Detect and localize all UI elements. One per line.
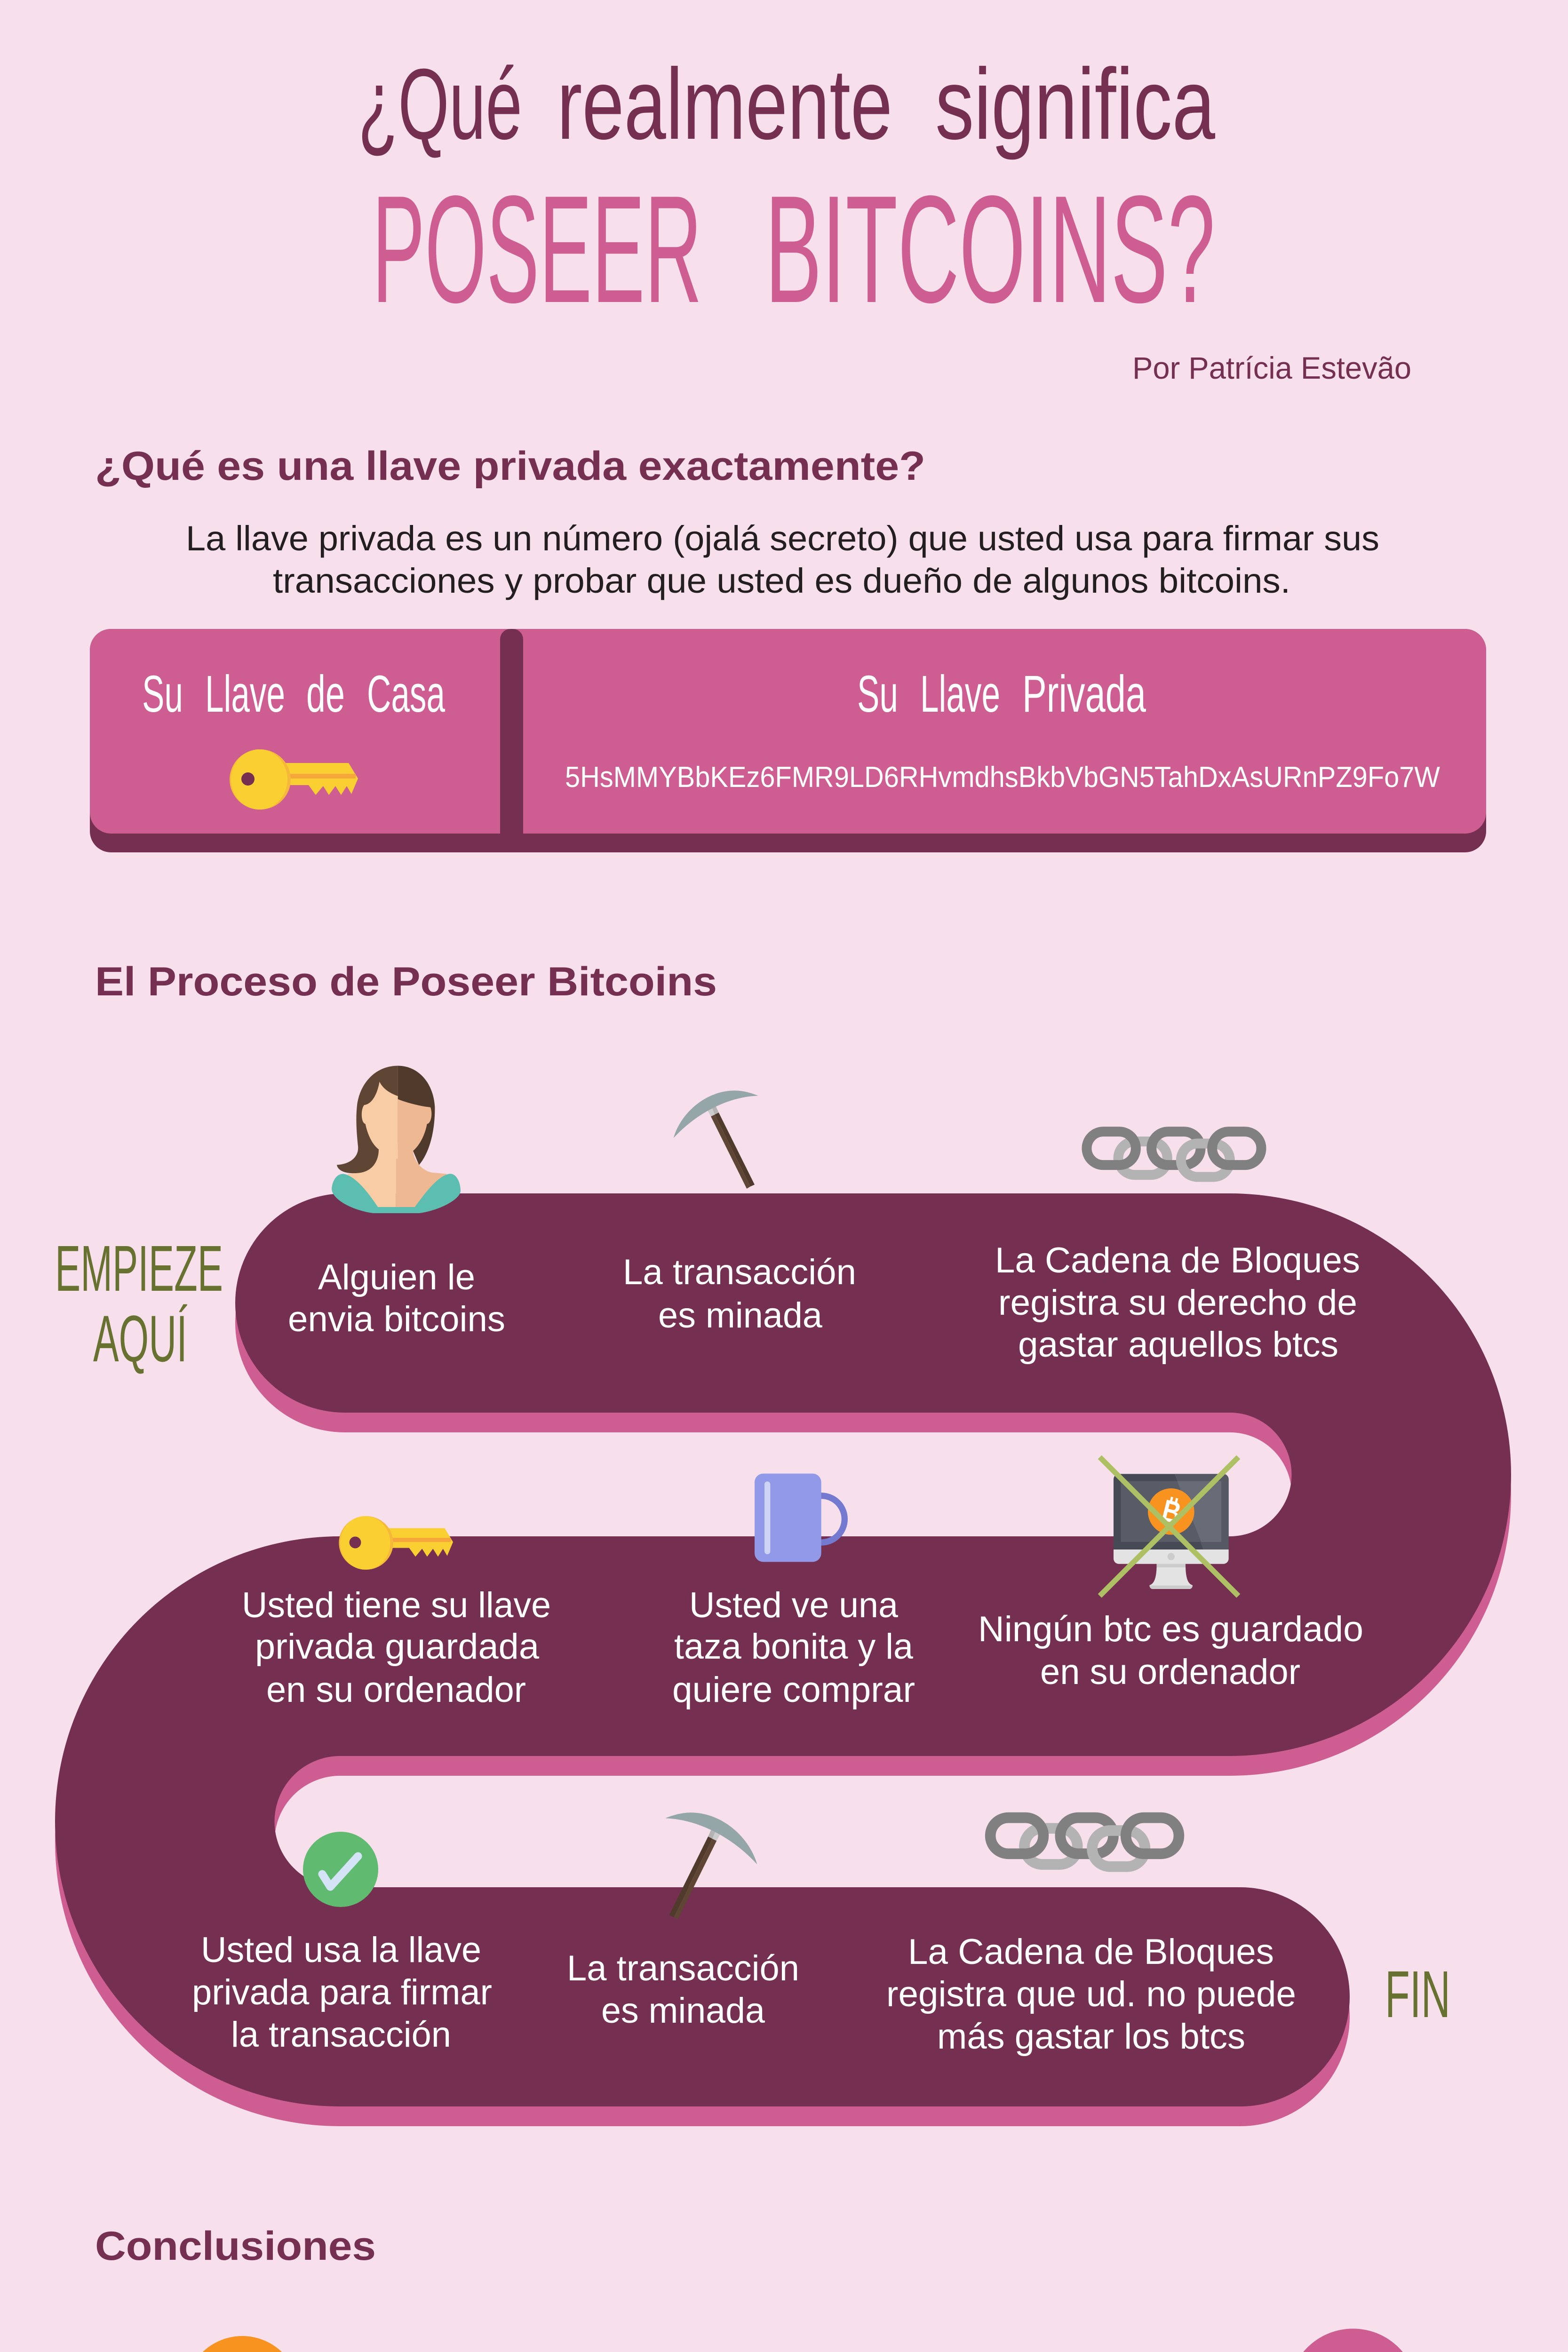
step text: transaction mined: La transacción: [623, 1252, 856, 1292]
step text: blockchain records spent: [886, 1932, 1296, 2057]
panel label: private key: Llave: [920, 665, 1000, 723]
heading: conclusions: Conclusiones: [95, 2224, 376, 2269]
icon: pickaxe mirrored: [665, 1812, 757, 1920]
step text: private key saved: Usted tiene su llave: [242, 1585, 551, 1625]
start label: AQUÍ: [93, 1302, 187, 1375]
panel label: private key: [857, 665, 1146, 723]
icon: house key: [230, 749, 358, 810]
panel label: house key: [142, 665, 446, 723]
panel label: private key: Privada: [1022, 665, 1146, 723]
start label: EMPIEZE: [55, 1232, 223, 1305]
title: [358, 48, 1216, 334]
winding process road: [55, 1193, 1511, 2126]
title line 1: ¿Qué: [358, 48, 522, 160]
title line 1: [358, 48, 1216, 160]
step text: transaction mined again: es minada: [601, 1991, 765, 2031]
heading: process: El Proceso de Poseer Bitcoins: [95, 959, 717, 1004]
step text: signs the transaction: [192, 1930, 492, 2055]
icon: key: [339, 1516, 453, 1570]
step text: wants to buy a mug: Usted ve una: [689, 1585, 899, 1625]
icon: chain: [1087, 1132, 1261, 1177]
panel label: private key: Su: [857, 665, 898, 723]
step text: wants to buy a mug: quiere comprar: [672, 1670, 915, 1710]
step text: no btc stored: [978, 1609, 1363, 1692]
step text: blockchain records spent: más gastar los btcs: [937, 2017, 1245, 2057]
bitcoin coin: [1148, 1488, 1194, 1535]
icon: pickaxe: [674, 1090, 758, 1189]
heading: private key: ¿Qué es una llave privada exactamente?: [95, 444, 925, 489]
icon: bitcoin coin: [185, 2336, 299, 2352]
step text: transaction mined: [623, 1252, 856, 1335]
end label: FIN: [1385, 1957, 1450, 2031]
panel label: house key: Su: [142, 665, 183, 723]
title line 1: significa: [935, 48, 1216, 160]
icon: mug: [755, 1474, 844, 1562]
icon: chain lower: [990, 1818, 1179, 1867]
step text: no btc stored: Ningún btc es guardado: [978, 1609, 1363, 1649]
step text: blockchain records right: [995, 1240, 1360, 1365]
step text: private key saved: privada guardada: [255, 1627, 540, 1667]
step text: blockchain records right: gastar aquellos btcs: [1018, 1325, 1338, 1365]
text block: private key definition: La llave privada es un número (ojalá secreto) que usted usa para firmar sus: [186, 519, 1379, 558]
icon: woman: [332, 1066, 461, 1213]
panel label: house key: Casa: [367, 665, 446, 723]
step text: transaction mined again: La transacción: [567, 1948, 799, 1988]
step text: private key saved: en su ordenador: [266, 1670, 526, 1710]
step text: someone sends bitcoins: Alguien le: [318, 1257, 475, 1297]
step text: signs the transaction: la transacción: [231, 2015, 451, 2055]
step text: someone sends bitcoins: [288, 1257, 505, 1339]
step text: wants to buy a mug: taza bonita y la: [674, 1627, 914, 1667]
private key string: 5HsMMYBbKEz6FMR9LD6RHvmdhsBkbVbGN5TahDxAsURnPZ9Fo7W: [565, 761, 1440, 794]
step text: blockchain records spent: registra que ud. no puede: [886, 1974, 1296, 2014]
step text: blockchain records right: registra su derecho de: [998, 1283, 1357, 1323]
step text: someone sends bitcoins: envia bitcoins: [288, 1299, 505, 1339]
title line 2: BITCOINS?: [765, 164, 1215, 334]
author credit: Por Patrícia Estevão: [1132, 350, 1411, 385]
step text: transaction mined: es minada: [658, 1295, 823, 1335]
icon: check mark: [303, 1832, 378, 1907]
step text: blockchain records right: La Cadena de Bloques: [995, 1240, 1360, 1280]
bitcoin coin: B: [1159, 1493, 1185, 1530]
step text: no btc stored: en su ordenador: [1040, 1652, 1300, 1692]
panel: house key versus private key: [90, 629, 1486, 852]
step text: private key saved: [242, 1585, 551, 1710]
step text: signs the transaction: Usted usa la llave: [201, 1930, 481, 1970]
step text: wants to buy a mug: [672, 1585, 915, 1710]
start label: [55, 1232, 223, 1375]
step text: signs the transaction: privada para firmar: [192, 1972, 492, 2012]
text block: private key definition: [186, 519, 1379, 600]
icon: padlock: [1289, 2328, 1417, 2352]
panel label: house key: de: [306, 665, 345, 723]
icon: crossed-out computer with bitcoin: [1100, 1457, 1238, 1596]
title line 2: POSEER: [372, 164, 702, 334]
step text: transaction mined again: [567, 1948, 799, 2031]
title line 1: realmente: [557, 48, 892, 160]
text block: private key definition: transacciones y probar que usted es dueño de algunos bitcoins.: [273, 561, 1290, 600]
step text: blockchain records spent: La Cadena de Bloques: [908, 1932, 1274, 1972]
panel label: house key: Llave: [205, 665, 285, 723]
